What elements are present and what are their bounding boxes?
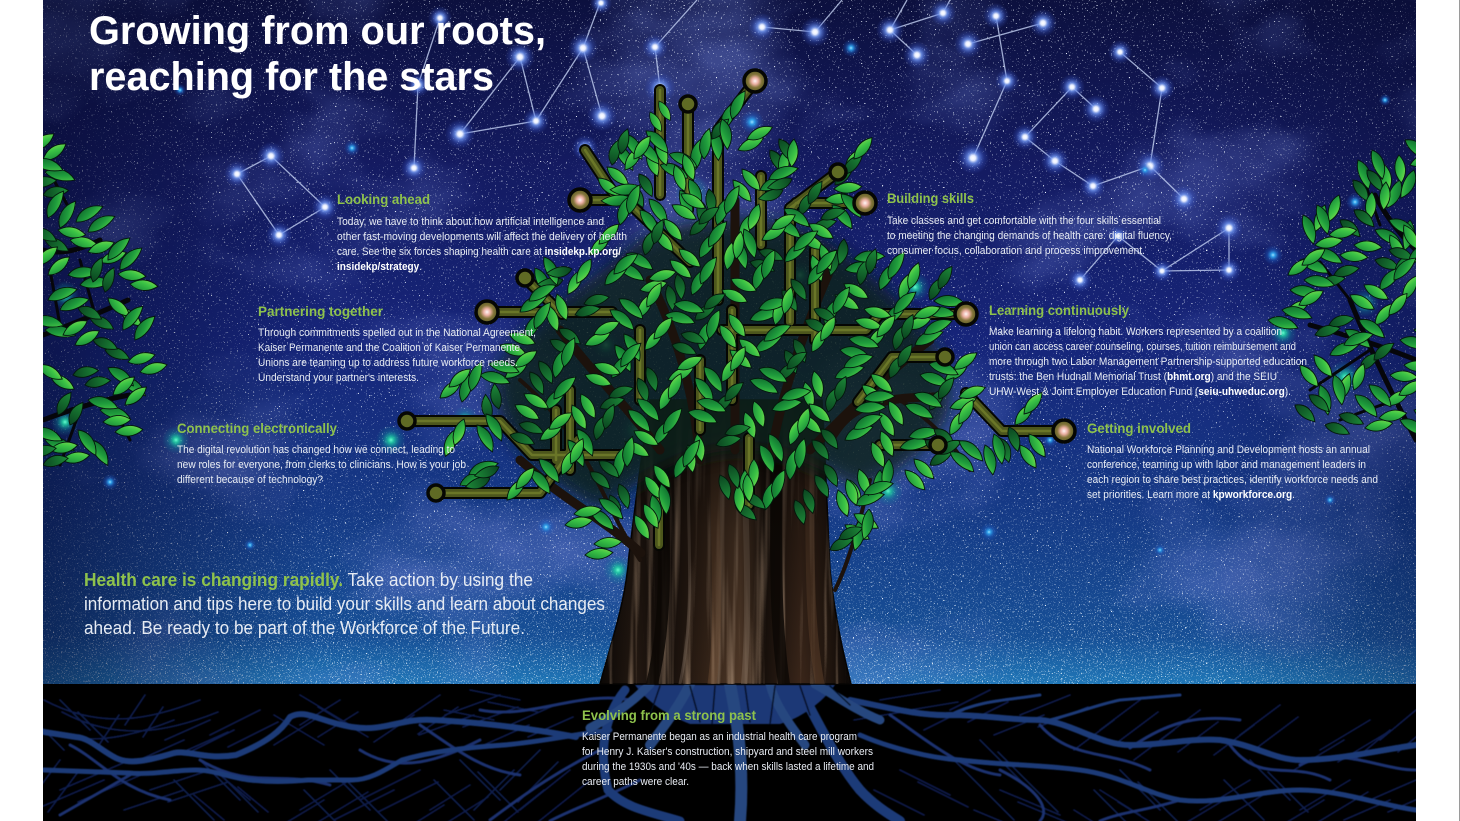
circuit branches [407,81,1064,545]
constellations [224,0,1243,292]
tree trunk [595,395,857,690]
text block: learning continuously: UHW-West & Joint Employer Education Fund (seiu-uhweduc.org). [989,386,1291,398]
text block: evolving from a strong past: Evolving from a strong past [582,707,756,723]
text block: partnering together: Understand your partner's interests. [258,372,419,384]
text block: connecting electronically: Connecting electronically [177,420,337,436]
intro text: health care is changing rapidly: ahead. Be ready to be part of the Workforce of the Future. [84,617,525,638]
text block: evolving from a strong past: during the 1930s and '40s — back when skills lasted a lifetime and [582,761,874,773]
intro text: health care is changing rapidly: Health care is changing rapidly. Take action by using the [84,569,533,590]
text block: evolving from a strong past: for Henry J. Kaiser's construction, shipyard and steel mill workers [582,746,873,758]
title: Growing from our roots, [89,9,546,53]
fireflies [51,39,1391,585]
text block: building skills: Take classes and get comfortable with the four skills essential [887,215,1161,227]
canopy dark mass and branches [495,200,970,590]
text block: partnering together: Kaiser Permanente and the Coalition of Kaiser Permanente [258,342,520,354]
text block: evolving from a strong past: career paths were clear. [582,776,689,788]
text block: learning continuously: union can access career counseling, courses, tuition reimbursement and [989,341,1296,353]
left side tree [43,134,168,468]
roots [4,684,1434,821]
intro text: health care is changing rapidly: information and tips here to build your skills and learn about changes [84,593,605,614]
text block: building skills: Building skills [887,190,974,206]
text block: learning continuously [989,302,1307,398]
text block: building skills [887,190,1172,257]
intro text: health care is changing rapidly [84,569,605,638]
text block: connecting electronically: different because of technology? [177,474,323,486]
text block: building skills: consumer focus, collaboration and process improvement. [887,245,1145,257]
ground [43,684,1416,821]
text block: getting involved [1087,420,1378,501]
text block: getting involved: Getting involved [1087,420,1191,436]
text block: partnering together: Through commitments spelled out in the National Agreement, [258,327,536,339]
text block: building skills: to meeting the changing demands of health care: digital fluency, [887,230,1172,242]
text block: getting involved: conference, teaming up with labor and management leaders in [1087,459,1366,471]
text block: looking ahead: other fast-moving developments will affect the delivery of health [337,231,627,243]
text block: looking ahead: Looking ahead [337,191,430,207]
text block: connecting electronically: new roles for everyone, from clerks to clinicians. How is your job [177,459,466,471]
text block: getting involved: set priorities. Learn more at kpworkforce.org. [1087,489,1295,501]
tree leaves [437,88,1049,560]
text block: looking ahead: care. See the six forces shaping health care at insidekp.kp.org/ [337,246,621,258]
title: reaching for the stars [89,55,494,99]
text block: learning continuously: more through two Labor Management Partnership-supported education [989,356,1307,368]
text block: learning continuously: Make learning a lifelong habit. Workers represented by a coalition [989,326,1282,338]
circuit terminals [399,70,1075,501]
text block: evolving from a strong past [582,707,874,788]
text block: partnering together [258,303,536,384]
text block: looking ahead: Today, we have to think about how artificial intelligence and [337,216,604,228]
text block: learning continuously: trusts: the Ben Hudnall Memorial Trust (bhmt.org) and the SEIU [989,371,1277,383]
text block: evolving from a strong past: Kaiser Permanente began as an industrial health care program [582,731,857,743]
text block: looking ahead: insidekp/strategy. [337,261,422,273]
night sky background [43,0,1416,685]
title [89,9,546,99]
text block: getting involved: National Workforce Planning and Development hosts an annual [1087,444,1370,456]
text block: looking ahead [337,191,627,273]
text block: learning continuously: Learning continuously [989,302,1129,318]
text block: getting involved: each region to share best practices, identify workforce needs and [1087,474,1378,486]
text block: connecting electronically [177,420,466,486]
right side tree [1267,139,1416,442]
text block: connecting electronically: The digital revolution has changed how we connect, leading to [177,444,455,456]
text block: partnering together: Unions are teaming up to address future workforce needs. [258,357,518,369]
text block: partnering together: Partnering together [258,303,384,319]
